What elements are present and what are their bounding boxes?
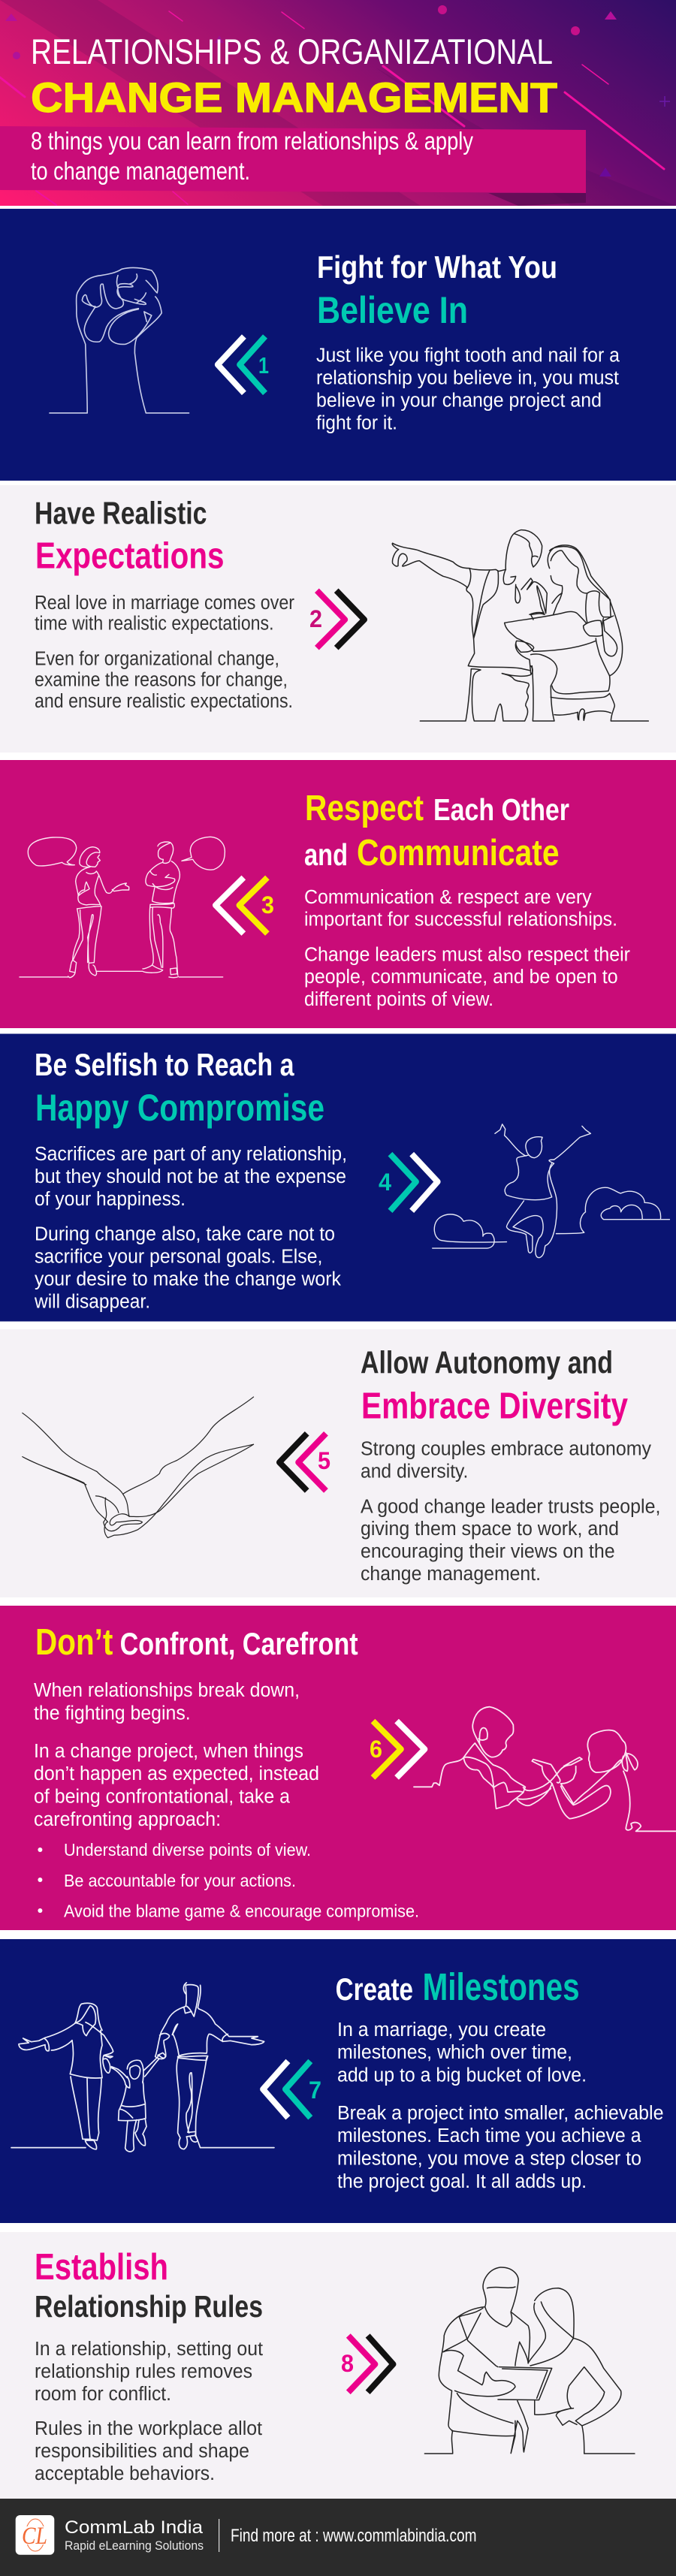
logo xyxy=(16,2515,54,2555)
heading: Each Other xyxy=(433,792,569,827)
chevrons with number 5: 5 xyxy=(318,1447,330,1474)
body text: different points of view. xyxy=(304,989,493,1010)
heading: Believe In xyxy=(317,289,468,331)
body text: In a relationship, setting out xyxy=(35,2339,263,2360)
body text xyxy=(35,593,294,712)
bullet list: Understand diverse points of view. xyxy=(64,1840,311,1860)
heading: Create xyxy=(336,1971,413,2007)
body text: time with realistic expectations. xyxy=(35,614,273,635)
body text: Even for organizational change, xyxy=(35,648,279,669)
heading xyxy=(35,2247,263,2324)
illustration: couple arguing xyxy=(414,1707,676,1831)
subtitle: to change management. xyxy=(31,157,250,185)
heading xyxy=(317,249,557,331)
illustration: person jumping over clouds xyxy=(433,1124,669,1258)
body text: the project goal. It all adds up. xyxy=(337,2171,587,2192)
chevrons with number 1 xyxy=(218,336,269,393)
body text: fight for it. xyxy=(316,412,397,433)
body text: responsibilities and shape xyxy=(35,2441,249,2462)
website link text: Find more at : www.commlabindia.com xyxy=(231,2526,476,2546)
body text: important for successful relationships. xyxy=(304,909,617,931)
footer xyxy=(0,2499,676,2576)
body text: add up to a big bucket of love. xyxy=(337,2065,587,2086)
body text: Break a project into smaller, achievable xyxy=(337,2103,664,2124)
body text: your desire to make the change work xyxy=(35,1268,341,1290)
bullet list: Avoid the blame game & encourage compromise. xyxy=(64,1902,419,1921)
heading: Milestones xyxy=(423,1965,580,2008)
body text xyxy=(361,1439,660,1585)
illustration: two people talking xyxy=(20,837,225,978)
body text: examine the reasons for change, xyxy=(35,670,288,691)
heading xyxy=(35,1047,324,1129)
brand name xyxy=(65,2517,204,2553)
heading: and xyxy=(304,837,348,872)
heading: Expectations xyxy=(35,536,224,577)
body text: believe in your change project and xyxy=(316,391,602,412)
heading: Fight for What You xyxy=(317,249,557,285)
panel 4: be selfish to reach a happy compromise xyxy=(0,1033,676,1322)
body text xyxy=(304,887,630,1010)
body text: Real love in marriage comes over xyxy=(35,593,294,614)
chevrons with number 6: 6 xyxy=(370,1736,382,1763)
header banner xyxy=(0,0,676,206)
body text: During change also, take care not to xyxy=(35,1224,335,1245)
body text: Rules in the workplace allot xyxy=(35,2418,262,2439)
panel 2: have realistic expectations xyxy=(0,485,676,753)
body text: but they should not be at the expense xyxy=(35,1166,346,1187)
panel 3: respect each other and communicate xyxy=(0,760,676,1028)
illustration: family walking hand in hand xyxy=(11,1983,274,2152)
body text: milestones, which over time, xyxy=(337,2042,572,2063)
heading: Respect xyxy=(305,789,424,828)
body text: Change leaders must also respect their xyxy=(304,945,630,966)
body text: encouraging their views on the xyxy=(361,1541,615,1562)
subtitle band xyxy=(0,126,586,193)
body text xyxy=(337,2019,664,2192)
bullet list: Be accountable for your actions. xyxy=(64,1871,296,1890)
heading: Have Realistic xyxy=(35,496,207,531)
body text: relationship you believe in, you must xyxy=(316,367,619,388)
body text: Sacrifices are part of any relationship, xyxy=(35,1144,347,1165)
body text: don’t happen as expected, instead xyxy=(34,1763,319,1784)
body text: In a marriage, you create xyxy=(337,2019,546,2041)
body text: and ensure realistic expectations. xyxy=(35,691,293,712)
chevrons with number 7 xyxy=(263,2061,321,2118)
brand name: Rapid eLearning Solutions xyxy=(65,2539,204,2553)
body text: relationship rules removes xyxy=(35,2361,252,2382)
chevrons with number 1: 1 xyxy=(258,352,269,379)
heading: Communicate xyxy=(357,833,559,873)
heading xyxy=(336,1965,580,2008)
illustration: couple with tablet xyxy=(424,2267,635,2454)
subtitle: 8 things you can learn from relationships & apply xyxy=(31,127,473,155)
heading: Don’t xyxy=(35,1622,113,1663)
heading xyxy=(304,789,569,873)
heading: Allow Autonomy and xyxy=(361,1345,613,1380)
body text xyxy=(316,345,620,433)
panel 8: establish relationship rules xyxy=(0,2232,676,2499)
heading xyxy=(35,496,224,577)
chevrons with number 4: 4 xyxy=(379,1169,391,1196)
body text: of being confrontational, take a xyxy=(34,1787,291,1808)
body text: carefronting approach: xyxy=(34,1809,221,1830)
chevrons with number 6 xyxy=(370,1721,424,1778)
panel 1: fight for what you believe in xyxy=(0,209,676,481)
body text: room for conflict. xyxy=(35,2384,171,2405)
subtitle xyxy=(31,127,473,185)
body text: In a change project, when things xyxy=(34,1741,303,1762)
body text: milestones. Each time you achieve a xyxy=(337,2125,641,2146)
body text: will disappear. xyxy=(34,1292,150,1313)
body text: acceptable behaviors. xyxy=(35,2463,215,2484)
body text xyxy=(34,1144,347,1313)
body text: giving them space to work, and xyxy=(361,1519,619,1540)
heading: Happy Compromise xyxy=(35,1087,324,1129)
body text: Communication & respect are very xyxy=(304,887,592,908)
illustration: couple reading a map xyxy=(392,530,648,721)
body text: Just like you fight tooth and nail for a xyxy=(316,345,620,366)
body text xyxy=(35,2339,263,2484)
chevrons with number 8 xyxy=(341,2336,393,2392)
heading: Establish xyxy=(35,2247,168,2288)
chevrons with number 2: 2 xyxy=(309,605,322,632)
chevrons with number 7: 7 xyxy=(309,2077,321,2104)
heading xyxy=(35,1622,358,1663)
body text xyxy=(34,1680,319,1830)
panel 7: create milestones xyxy=(0,1939,676,2223)
body text: change management. xyxy=(361,1564,541,1585)
body text: sacrifice your personal goals. Else, xyxy=(35,1246,322,1267)
bullet list xyxy=(38,1840,419,1921)
body text: When relationships break down, xyxy=(34,1680,300,1701)
icon: raised fist xyxy=(50,268,189,413)
body text: the fighting begins. xyxy=(34,1703,191,1724)
panel 5: allow autonomy and embrace diversity xyxy=(0,1329,676,1597)
brand name: CommLab India xyxy=(65,2517,204,2538)
body text: Strong couples embrace autonomy xyxy=(361,1439,651,1460)
chevrons with number 2 xyxy=(309,590,364,648)
chevrons with number 5 xyxy=(279,1434,330,1491)
body text: people, communicate, and be open to xyxy=(304,967,618,988)
chevrons with number 8: 8 xyxy=(341,2350,354,2377)
chevrons with number 3 xyxy=(216,878,274,934)
title line 1: RELATIONSHIPS & ORGANIZATIONAL xyxy=(31,32,553,71)
heading: Be Selfish to Reach a xyxy=(35,1047,294,1082)
logo: CL xyxy=(22,2523,47,2550)
chevrons with number 3: 3 xyxy=(261,891,274,918)
body text: A good change leader trusts people, xyxy=(361,1496,660,1517)
panel 6: don't confront, carefront xyxy=(0,1606,676,1930)
illustration: holding hands xyxy=(23,1397,254,1538)
title line 2: CHANGE MANAGEMENT xyxy=(31,74,557,121)
chevrons with number 4 xyxy=(379,1154,438,1211)
body text: of your happiness. xyxy=(35,1189,186,1210)
heading: Confront, Carefront xyxy=(120,1626,358,1661)
body text: and diversity. xyxy=(361,1461,468,1483)
body text: milestone, you move a step closer to xyxy=(337,2149,641,2170)
heading: Relationship Rules xyxy=(35,2289,263,2324)
heading: Embrace Diversity xyxy=(361,1386,628,1426)
heading xyxy=(361,1345,628,1426)
